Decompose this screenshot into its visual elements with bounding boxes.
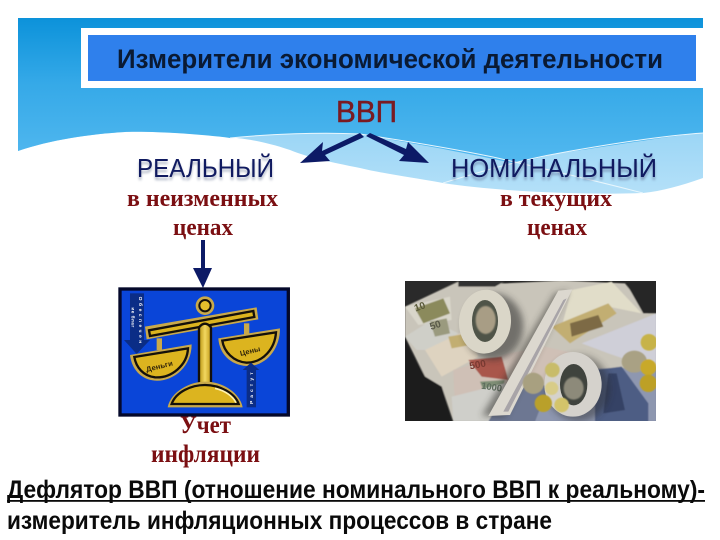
banknote numerals (413, 300, 503, 394)
text: в неизменных ценах: ценах (173, 215, 233, 241)
left pan (157, 338, 162, 350)
heading: ВВП: ВВП (336, 94, 397, 129)
text: Учет инфляции (151, 412, 260, 468)
banknote numerals: 10 (413, 300, 428, 314)
arrow: to nominal GDP (366, 133, 429, 163)
text: Учет инфляции: Учет (180, 412, 231, 439)
scale beam (145, 307, 258, 339)
blue arrow: money supply (124, 293, 150, 354)
banknote numerals: 1000 (481, 381, 503, 394)
right pan (244, 323, 249, 335)
banknote numerals: 500 (469, 358, 487, 372)
text: в текущих ценах: ценах (527, 215, 587, 241)
text: Учет инфляции: инфляции (151, 441, 260, 468)
background: blue sky with white wave (18, 18, 703, 194)
icon: scales illustration: Деньги (145, 359, 174, 374)
title banner (81, 28, 703, 88)
banknote numerals: 50 (429, 319, 443, 333)
blue arrow: money supply: ие благ (130, 307, 136, 327)
image: banknotes with percent sign (405, 281, 657, 422)
icon: scales illustration: Цены (239, 344, 261, 358)
pivot (196, 296, 214, 315)
blue arrow: rising prices (243, 363, 259, 407)
coins (523, 334, 657, 412)
label: НОМИНАЛЬНЫЙ: НОМИНАЛЬНЫЙ (451, 153, 657, 183)
text: в неизменных ценах (127, 186, 278, 241)
text: deflator definition: измеритель инфляционных процессов в стране (7, 507, 552, 535)
percent sign (456, 288, 610, 422)
arrow: to real GDP (300, 133, 364, 163)
blue arrow: rising prices: Растут (249, 372, 255, 404)
label: РЕАЛЬНЫЙ: РЕАЛЬНЫЙ (137, 156, 274, 186)
icon: scales illustration (120, 289, 288, 415)
text: в текущих ценах (500, 186, 612, 241)
text: в неизменных ценах: в неизменных (127, 186, 278, 212)
label: РЕАЛЬНЫЙ: РЕАЛЬНЫЙ (137, 153, 274, 183)
text: deflator definition (7, 476, 705, 535)
text: в текущих ценах: в текущих (500, 186, 612, 212)
column and base (199, 324, 211, 385)
title: Измерители экономической деятельности (117, 44, 663, 74)
blue arrow: money supply: Обеспечен (137, 297, 144, 343)
arrow: down to scales (193, 240, 212, 288)
label: НОМИНАЛЬНЫЙ: НОМИНАЛЬНЫЙ (451, 156, 657, 186)
